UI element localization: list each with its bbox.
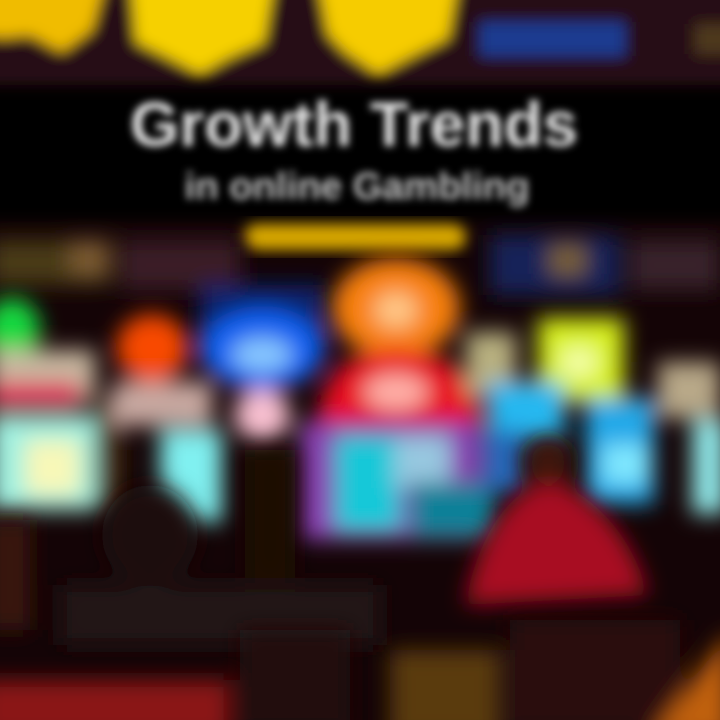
floor — [0, 620, 720, 720]
title: Growth Trends — [130, 90, 578, 160]
machine 1 — [0, 298, 120, 510]
machine 2 — [112, 314, 222, 522]
subtitle: in online Gambling — [184, 166, 530, 208]
yellow tag — [244, 224, 466, 250]
crowd silhouettes — [0, 436, 648, 645]
machine 5 — [466, 318, 624, 492]
casino background lights — [0, 235, 720, 340]
black title band — [0, 88, 720, 220]
machine 6 — [586, 362, 720, 514]
slot machines — [0, 258, 720, 540]
top banner with yellow awnings — [0, 0, 720, 85]
machine 4 — [300, 258, 495, 540]
machine 3 — [200, 306, 324, 441]
